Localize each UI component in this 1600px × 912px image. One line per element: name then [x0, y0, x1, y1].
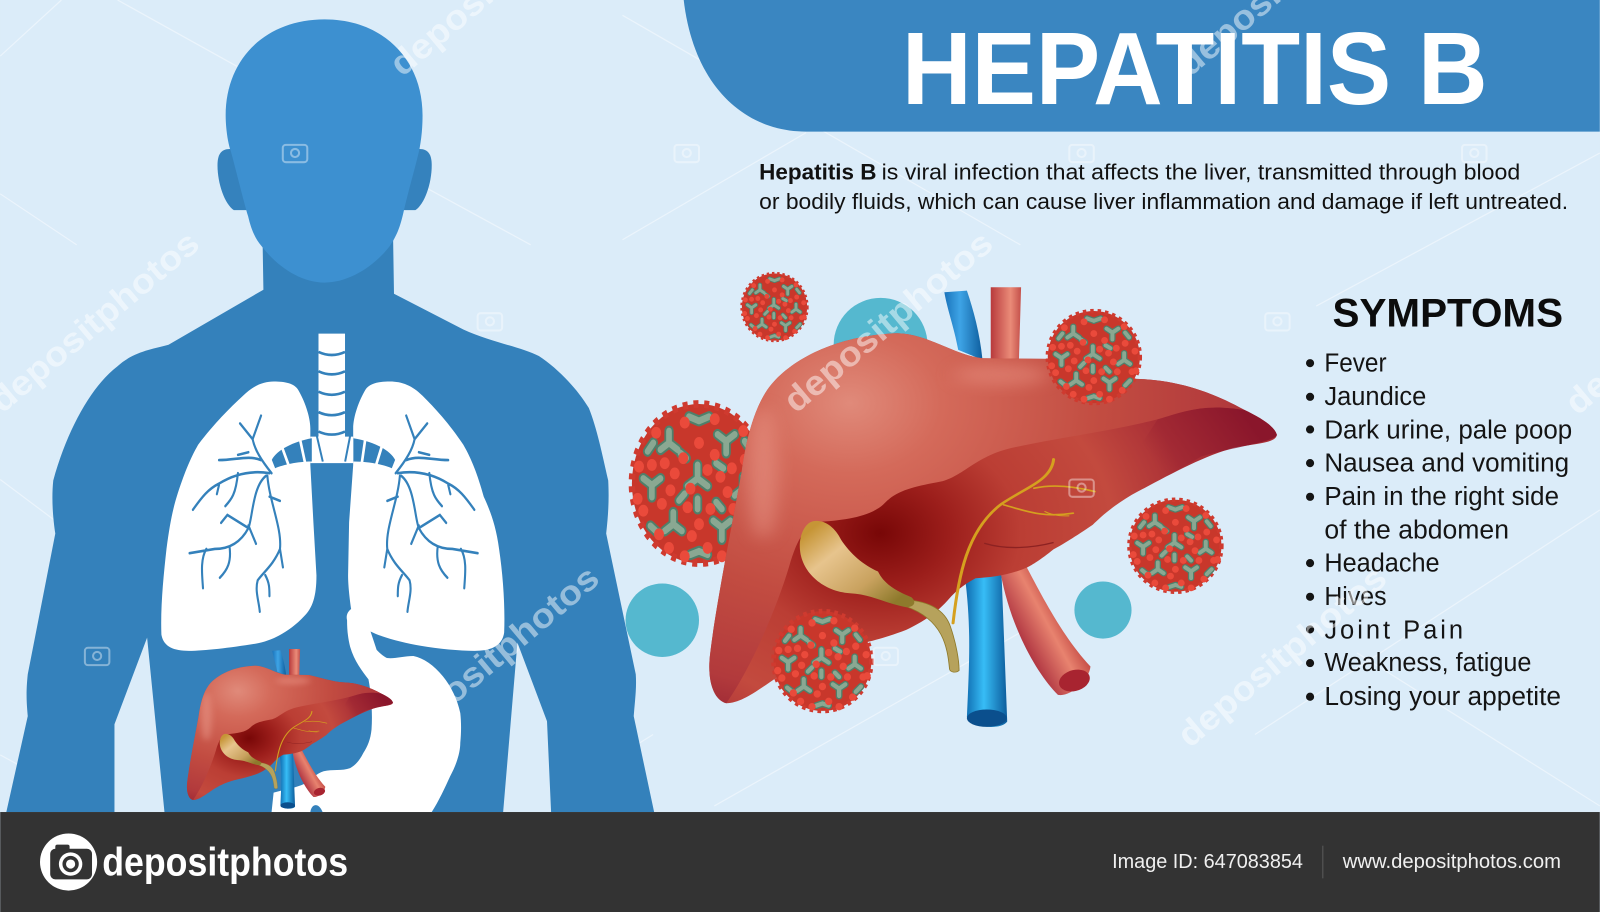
symptoms list: Hives	[1324, 583, 1387, 611]
header banner	[684, 0, 1600, 132]
small liver in body	[187, 649, 393, 809]
virus particle: bottom	[774, 611, 871, 711]
right lung and stomach	[272, 382, 504, 812]
left lung	[161, 382, 316, 651]
watermarks: depositphotos	[777, 224, 1000, 420]
left ear	[218, 149, 250, 210]
head	[226, 19, 423, 283]
symptoms list: Joint Pain	[1324, 617, 1463, 645]
watermark camera icons	[85, 145, 1487, 665]
virus particle: top right	[1048, 311, 1140, 403]
description: is viral infection that affects the liver, transmitted through blood	[882, 160, 1520, 185]
watermarks: depositphotos	[1170, 559, 1394, 755]
footer logo wordmark: depositphotos	[102, 840, 348, 884]
bronchial tree left	[190, 416, 283, 612]
teal splat: lower left	[626, 584, 699, 657]
large liver	[709, 287, 1277, 727]
trachea	[310, 334, 353, 463]
virus particle: top	[742, 273, 807, 341]
bronchial tree right	[384, 416, 478, 612]
description	[759, 160, 1568, 214]
website: www.depositphotos.com	[1342, 851, 1561, 873]
stomach lower notch	[310, 805, 323, 812]
symptoms list: Weakness, fatigue	[1324, 649, 1531, 677]
virus particle: large left	[632, 404, 766, 563]
symptoms list: Jaundice	[1324, 383, 1426, 411]
title: HEPATITIS B	[902, 11, 1488, 126]
symptoms list: Nausea and vomiting	[1324, 449, 1569, 477]
human body silhouette	[6, 230, 654, 812]
right ear	[399, 149, 432, 210]
symptoms heading: SYMPTOMS	[1333, 291, 1563, 335]
symptoms list: Pain in the right side	[1324, 483, 1559, 511]
description: Hepatitis B	[759, 160, 877, 185]
symptoms list: Losing your appetite	[1324, 683, 1561, 711]
image id: Image ID: 647083854	[1112, 851, 1303, 873]
footer separator	[1322, 846, 1323, 878]
symptoms list: Fever	[1324, 349, 1387, 377]
symptoms list	[1310, 349, 1572, 711]
footer bar	[0, 812, 1600, 912]
virus particle: right	[1129, 500, 1221, 592]
lungs and airways	[161, 334, 504, 812]
description: or bodily fluids, which can cause liver inflammation and damage if left untreated.	[759, 189, 1568, 214]
footer logo icon	[40, 833, 97, 891]
symptoms list: Dark urine, pale poop	[1324, 417, 1572, 445]
teal splat: behind liver	[834, 298, 928, 392]
watermarks: depositphotos	[383, 559, 607, 755]
bronchi	[272, 436, 395, 468]
symptoms list: Headache	[1324, 549, 1440, 577]
symptoms list: of the abdomen	[1324, 517, 1509, 545]
teal splat: lower right	[1074, 581, 1132, 639]
